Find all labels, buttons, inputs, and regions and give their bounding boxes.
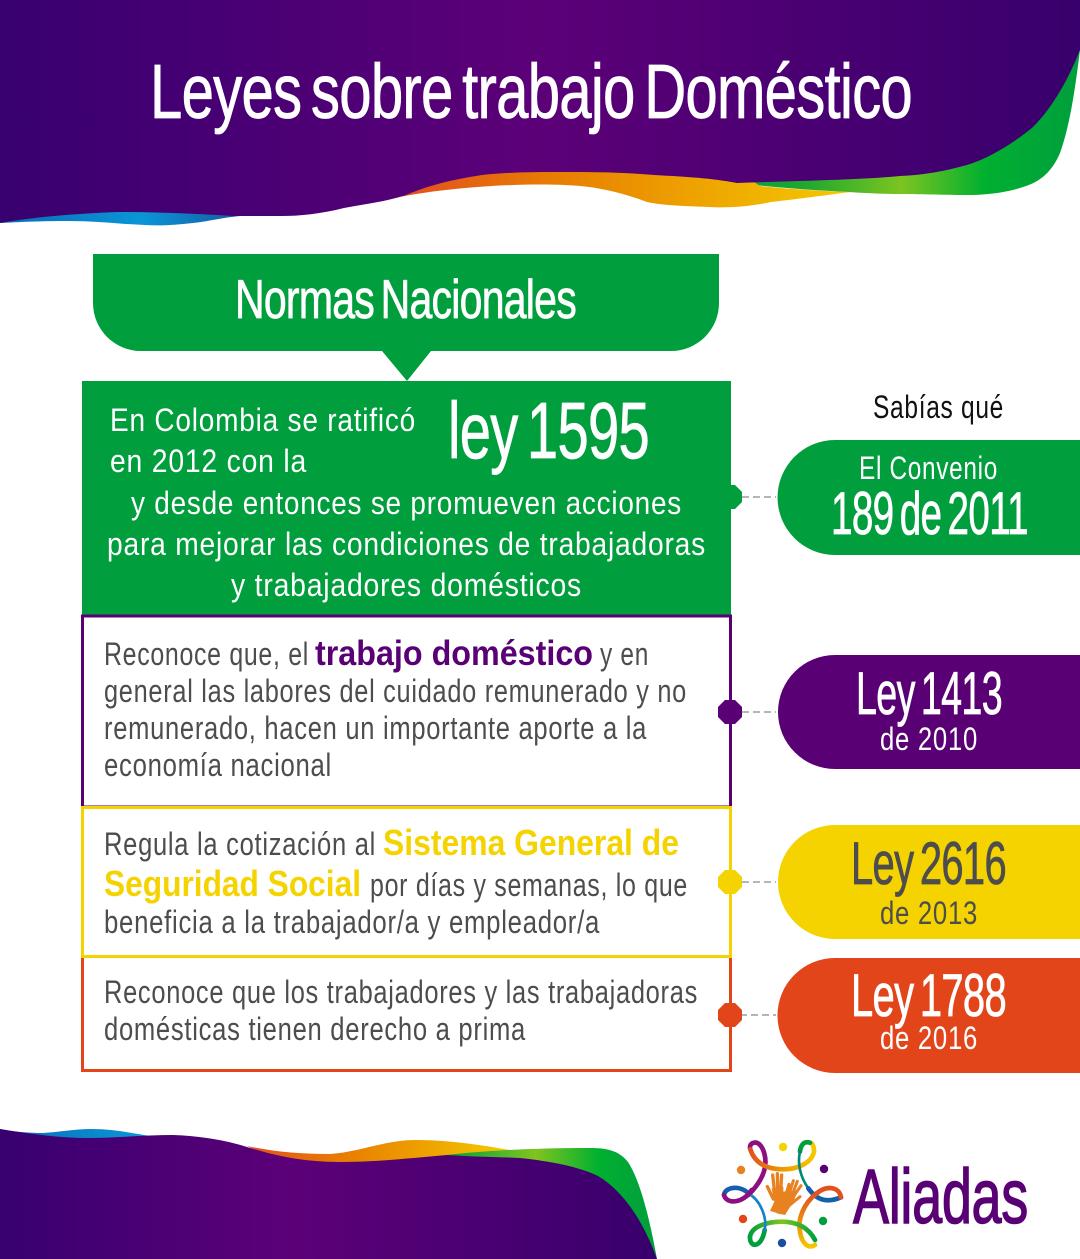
panel: ley 1788 text: domésticas tienen derecho a prima — [104, 1011, 526, 1047]
panel: ley 1413 text: Reconoce que, el — [104, 636, 309, 672]
panel: ley 1413 text: general las labores del cuidado remunerado y no — [104, 673, 687, 709]
header banner — [0, 0, 1080, 225]
panel: ley 1595 — [82, 381, 742, 615]
panel: ley 2616 text — [82, 808, 730, 956]
panel: ley 1413 text: remunerado, hacen un importante aporte a la — [104, 710, 647, 746]
pill: Ley 2616: de 2013 — [880, 895, 978, 931]
side heading: Sabías qué: Sabías qué — [873, 389, 1004, 425]
panel: ley 2616 text: por días y semanas, lo que — [370, 867, 688, 903]
dot: green — [718, 485, 742, 509]
pill: Ley 2616 — [778, 825, 1080, 939]
panel: ley 1595: ley 1595 — [448, 386, 649, 475]
icon: dots around emblem — [737, 1143, 828, 1247]
panel: ley 1413 text — [82, 616, 730, 807]
dot: yellow — [718, 870, 742, 894]
logo: Aliadas — [724, 1142, 1028, 1247]
header green ribbon — [737, 50, 1080, 195]
pill: Ley 1413: de 2010 — [880, 721, 978, 757]
footer wave — [0, 1129, 657, 1259]
panel: ley 1413 text: economía nacional — [104, 747, 332, 783]
panel: ley 2616 text: Seguridad Social — [104, 863, 361, 904]
panel: ley 1595: y trabajadores domésticos — [231, 567, 582, 603]
pill: Ley 2616: Ley 2616 — [851, 830, 1006, 897]
footer orange ribbon — [247, 1140, 510, 1170]
pill: Convenio 189: El Convenio — [859, 450, 998, 486]
header orange ribbon — [400, 160, 850, 207]
heading callout: Normas Nacionales — [93, 254, 719, 381]
icon: gloves — [767, 1174, 801, 1215]
header blue ribbon — [0, 205, 240, 225]
panel: ley 2616 text: beneficia a la trabajador/a y empleador/a — [104, 904, 600, 940]
panel: ley 2616 text: Regula la cotización al — [104, 826, 376, 862]
pill: Convenio 189 — [778, 440, 1080, 555]
heading callout: Normas Nacionales: Normas Nacionales — [235, 268, 576, 330]
panel: ley 1595: y desde entonces se promueven acciones — [131, 485, 682, 521]
footer blue ribbon — [0, 1129, 150, 1145]
panel: ley 1595: en 2012 con la — [110, 443, 307, 479]
panel: ley 1595: para mejorar las condiciones de trabajadoras — [107, 526, 706, 562]
footer green ribbon — [447, 1148, 657, 1259]
pill: Ley 1788: de 2016 — [880, 1020, 978, 1056]
pill: Ley 1413 — [778, 655, 1080, 769]
pill: Ley 1788 — [777, 958, 1080, 1073]
header purple wave — [0, 0, 1080, 223]
panel: ley 1413 text: trabajo doméstico — [315, 634, 593, 673]
dot: purple — [718, 700, 742, 724]
dot: orange — [718, 1003, 742, 1027]
panel: ley 1788 text — [82, 958, 730, 1070]
panel: ley 2616 text: Sistema General de — [383, 822, 679, 863]
pill: Ley 1788: Ley 1788 — [851, 962, 1006, 1029]
panel: ley 1413 text: y en — [600, 636, 649, 672]
panel: ley 1788 text: Reconoce que los trabajadores y las trabajadoras — [104, 974, 698, 1010]
connector lines — [718, 497, 776, 1015]
icon: ribbon emblem — [724, 1142, 841, 1246]
footer purple wave — [0, 1129, 657, 1259]
panel: ley 1595: En Colombia se ratificó — [110, 402, 416, 438]
